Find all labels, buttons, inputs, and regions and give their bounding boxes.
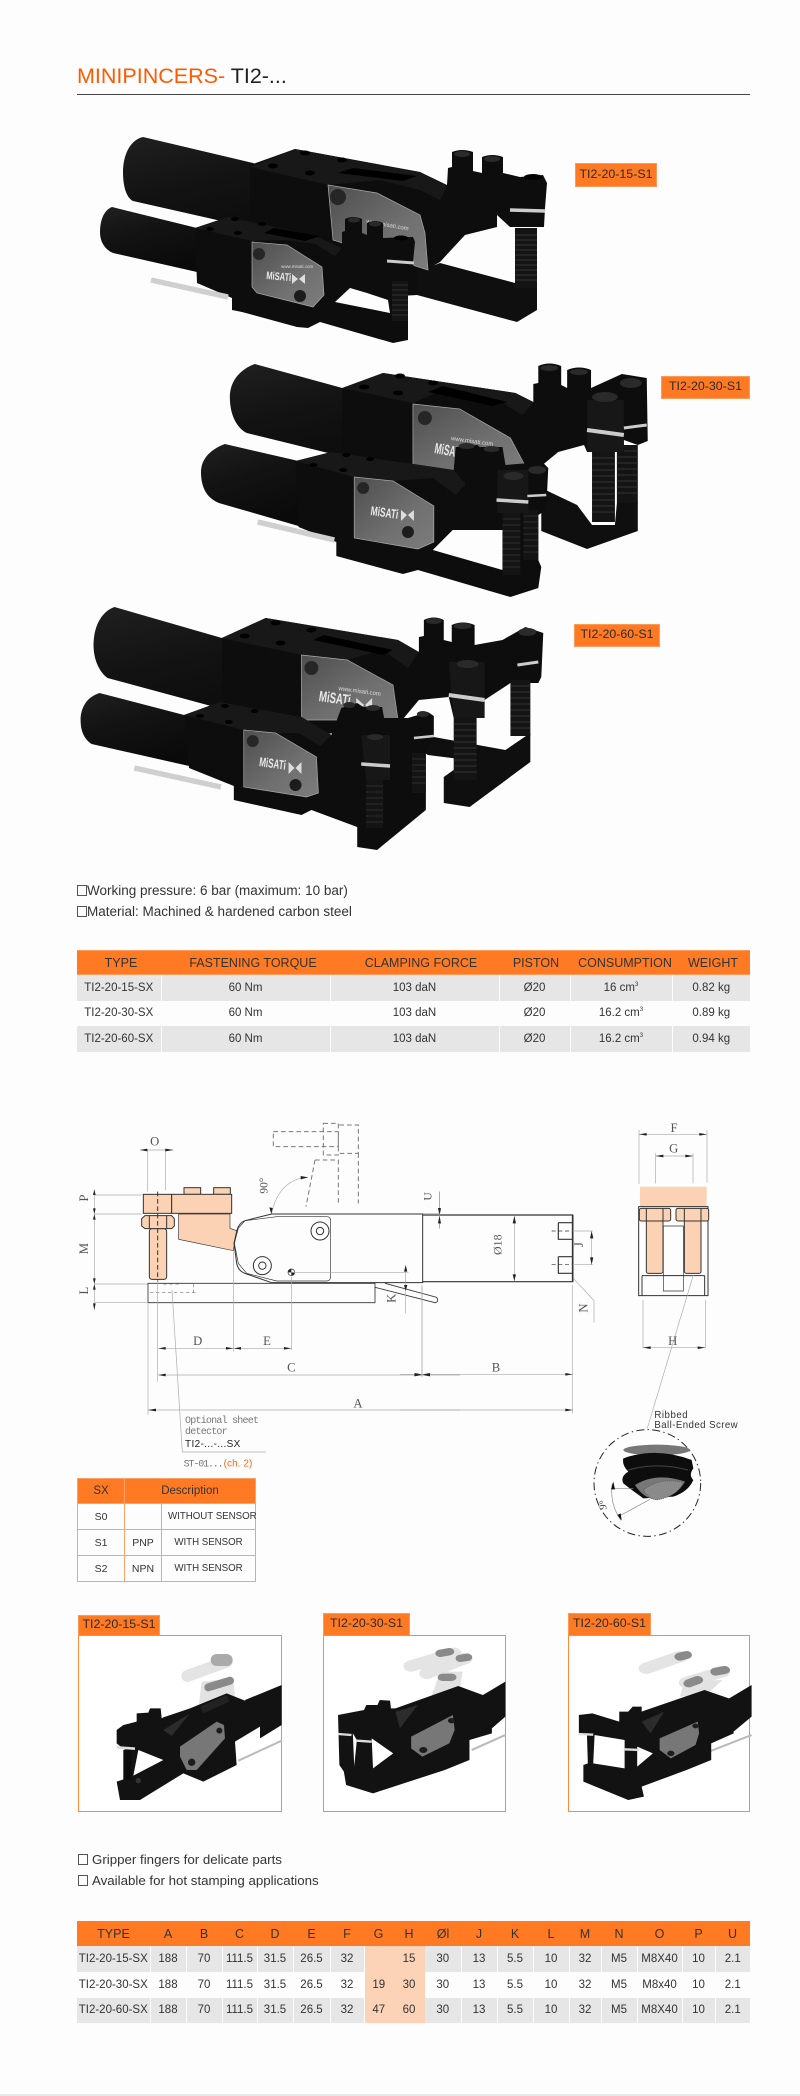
dimensions table: 188 (158, 2004, 178, 2016)
specifications table: 0.94 kg (692, 1033, 730, 1045)
dimensions table: 32 (579, 2004, 591, 2016)
panel: TI2-20-15-S1 (78, 1615, 282, 1812)
dimensions table: C (235, 1926, 244, 1940)
dimensions table: 30 (436, 2004, 449, 2016)
specifications table header: WEIGHT (688, 956, 738, 970)
dimension letters: C (287, 1361, 296, 1375)
bullet: hot stamping: Available for hot stamping applications (92, 1873, 319, 1888)
specifications table: 16.2 cm3 (599, 1033, 643, 1045)
specifications table header: CONSUMPTION (578, 956, 672, 970)
dimensions table: 10 (692, 1953, 705, 1965)
dimensions table: 31.5 (264, 1979, 286, 1991)
optional sheet detector note (184, 1415, 259, 1470)
dimensions table: N (614, 1926, 624, 1940)
opening stroke render 1 (117, 1660, 282, 1800)
specifications table: TI2-20-15-SX (84, 982, 153, 994)
dimension letters: L (77, 1287, 91, 1295)
dimensions table: 70 (198, 1953, 210, 1965)
dimensions table: 32 (341, 2004, 353, 2016)
large gripper (123, 137, 547, 322)
dimensions table: H (404, 1926, 414, 1940)
small gripper (201, 443, 548, 597)
large gripper (94, 607, 543, 807)
front view: G (669, 1142, 678, 1156)
dimensions table: 32 (341, 1953, 353, 1965)
dimensions table: 32 (579, 1953, 591, 1965)
bullet: material: Material: Machined & hardened carbon steel (87, 904, 352, 919)
dimensions table: 60 (403, 2004, 415, 2016)
dimensions table: 188 (158, 1953, 178, 1965)
tag: TI2-20-30-S1 (330, 1616, 403, 1630)
specifications table header: TYPE (105, 956, 137, 970)
optional sheet detector note: detector (185, 1426, 228, 1437)
specifications table header (77, 950, 750, 975)
specifications table: TI2-20-60-SX (84, 1033, 153, 1045)
dimensions table: 10 (692, 1979, 705, 1991)
dimensions table: 30 (436, 1953, 449, 1965)
rod (375, 1283, 438, 1303)
dimensions table: M8X40 (641, 2004, 678, 2016)
small gripper: www.misati.com (281, 264, 314, 269)
front view: H (668, 1334, 677, 1348)
optional sheet detector note: Optional sheet (185, 1415, 259, 1426)
optional sheet detector note: ST-01... (184, 1459, 224, 1470)
jaw (148, 1283, 375, 1303)
label: TI2-20-15-S1: TI2-20-15-S1 (579, 167, 652, 181)
dimensions table: 2.1 (725, 1979, 741, 1991)
tag (78, 1615, 160, 1636)
cylinder: B (492, 1361, 500, 1375)
dimension letters: 90° (258, 1178, 270, 1194)
dimensions table: TI2-20-60-SX (79, 2004, 148, 2016)
dimension letters: M (77, 1243, 91, 1254)
product photo: TI2-20-15-S1 (100, 137, 547, 343)
panel: TI2-20-30-S1 (323, 1613, 506, 1812)
front view: F (670, 1121, 678, 1135)
dimension letters: E (263, 1334, 271, 1348)
dimensions table (77, 1921, 750, 2023)
sensor description table: Description (161, 1485, 219, 1497)
specifications table: 60 Nm (229, 1007, 262, 1019)
opening stroke render 2 (338, 1652, 505, 1793)
tag (568, 1613, 651, 1636)
dimensions table: F (343, 1926, 351, 1940)
sensor description table: SX (93, 1485, 109, 1497)
dimensions table: 10 (545, 1979, 557, 1991)
dimensions table: A (164, 1926, 172, 1940)
small gripper: MiSATi (266, 270, 292, 284)
sensor description table: PNP (132, 1536, 154, 1548)
dimensions table: 31.5 (264, 1953, 286, 1965)
dimensions table: Øl (437, 1926, 449, 1940)
specifications table: Ø20 (524, 1033, 545, 1045)
specifications table: 103 daN (393, 1033, 436, 1045)
dimensions table: M8X40 (641, 1953, 678, 1965)
dimensions table: L (548, 1926, 554, 1940)
specifications table: 16 cm3 (604, 982, 638, 994)
dimensions table: 15 (403, 1953, 415, 1965)
cylinder: Ø18 (491, 1234, 505, 1255)
dimensions table: P (694, 1926, 703, 1940)
dimensions table: TI2-20-15-SX (79, 1953, 148, 1965)
large gripper: MiSATi (318, 688, 352, 709)
large gripper: www.misati.com (365, 219, 409, 232)
dimensions table: 5.5 (507, 2004, 523, 2016)
tag (323, 1613, 410, 1636)
optional sheet detector note: (ch. 2) (224, 1459, 252, 1470)
dimensions table: TI2-20-30-SX (79, 1979, 148, 1991)
sensor description table: WITH SENSOR (174, 1537, 243, 1548)
large gripper: www.misati.com (337, 686, 381, 698)
product photo: TI2-20-60-S1 (81, 607, 543, 850)
dimensions table: 10 (545, 2004, 557, 2016)
large gripper (230, 364, 648, 549)
dimensions table: 10 (692, 2004, 705, 2016)
dimensions table: U (728, 1926, 737, 1940)
dimensions table: B (200, 1926, 208, 1940)
dimension letters: A (353, 1397, 363, 1411)
clamp arm (peach) (142, 1188, 237, 1279)
opening stroke render 3 (579, 1655, 752, 1800)
dimensions table: 111.5 (226, 2004, 253, 2016)
ribbed ball-ended screw detail: 9° (599, 1500, 610, 1510)
dimensions table: 13 (473, 2004, 485, 2016)
dimensions table: 2.1 (725, 1953, 741, 1965)
dimension letters: U (422, 1192, 434, 1200)
ribbed ball-ended screw detail: Ball-Ended Screw (654, 1420, 738, 1431)
dimension letters: P (77, 1194, 91, 1202)
cylinder: J (572, 1242, 586, 1247)
frame (323, 1635, 506, 1812)
label: TI2-20-30-S1: TI2-20-30-S1 (669, 379, 742, 393)
tag: TI2-20-60-S1 (573, 1616, 646, 1630)
large gripper: MiSATi (433, 440, 464, 462)
specifications table header: PISTON (513, 956, 559, 970)
dimensions table: 32 (579, 1979, 591, 1991)
dimensions table: 70 (198, 1979, 210, 1991)
frame (78, 1635, 282, 1812)
cylinder: N (576, 1303, 590, 1313)
small gripper: MiSATi (370, 503, 399, 522)
body (234, 1214, 423, 1283)
specifications table: 16.2 cm3 (599, 1007, 643, 1019)
dimensions table: 111.5 (226, 1953, 253, 1965)
sensor description table: S1 (95, 1536, 107, 1548)
sensor description table (77, 1478, 257, 1582)
dimensions table: M8x40 (642, 1979, 677, 1991)
small gripper: MiSATi (258, 754, 287, 773)
dimensions table: E (307, 1926, 316, 1940)
dimensions table: 30 (436, 1979, 449, 1991)
optional sheet detector note: TI2-...-...SX (185, 1439, 241, 1450)
dimension lines (94, 1150, 460, 1452)
dimensions table: K (511, 1926, 519, 1940)
dimension letters: O (150, 1134, 159, 1148)
panel: TI2-20-60-S1 (568, 1613, 750, 1812)
dimensions table: 26.5 (300, 1979, 323, 1991)
dimensions table: 111.5 (226, 1979, 253, 1991)
sensor description table: WITHOUT SENSOR (168, 1511, 257, 1522)
cylinder (400, 1192, 594, 1413)
dimensions table: 26.5 (300, 1953, 323, 1965)
dimensions table: D (270, 1926, 280, 1940)
ribbed ball-ended screw detail (594, 1410, 738, 1536)
dimensions table: 32 (341, 1979, 353, 1991)
bullet: working pressure: Working pressure: 6 bar (maximum: 10 bar) (87, 883, 348, 898)
dimensions table: TYPE (97, 1926, 130, 1940)
sensor description table: S0 (95, 1510, 107, 1522)
dimensions table: J (476, 1926, 482, 1940)
dimensions table: 5.5 (507, 1953, 523, 1965)
product photo: TI2-20-30-S1 (201, 364, 648, 597)
dimensions table: 26.5 (300, 2004, 323, 2016)
specifications table: 0.89 kg (692, 1007, 730, 1019)
side view (77, 1123, 460, 1470)
dimensions table: 2.1 (725, 2004, 741, 2016)
sensor description table: WITH SENSOR (174, 1563, 243, 1574)
dimension letters: K (385, 1293, 399, 1303)
ribbed ball-ended screw detail: Ribbed (654, 1410, 688, 1421)
dimension letters: D (193, 1334, 202, 1348)
dimensions table: M (580, 1926, 590, 1940)
large gripper: www.misati.com (449, 436, 494, 448)
sensor description table: S2 (95, 1562, 107, 1574)
dimensions table: 70 (198, 2004, 210, 2016)
ghost fingers (273, 1123, 358, 1207)
specifications table: 60 Nm (229, 1033, 262, 1045)
specifications table: 103 daN (393, 1007, 436, 1019)
dimensions table: 13 (473, 1953, 485, 1965)
specifications table: 103 daN (393, 982, 436, 994)
tag: TI2-20-15-S1 (82, 1617, 156, 1631)
title: MINIPINCERS- TI2-... (77, 64, 287, 88)
dimensions table: O (655, 1926, 664, 1940)
dimensions table: 10 (545, 1953, 557, 1965)
dimensions table: 19 (372, 1979, 385, 1991)
sensor description table: NPN (132, 1562, 154, 1574)
label: TI2-20-60-S1: TI2-20-60-S1 (580, 627, 654, 641)
dimensions table: 13 (473, 1979, 485, 1991)
dimensions table: 47 (372, 2004, 385, 2016)
dimensions table: 5.5 (507, 1979, 523, 1991)
front view (594, 1121, 738, 1536)
dimensions table: M5 (611, 1979, 627, 1991)
dimensions table: M5 (611, 1953, 627, 1965)
dimensions table: 30 (403, 1979, 415, 1991)
specifications table: Ø20 (524, 982, 545, 994)
dimensions table: G (374, 1926, 383, 1940)
specifications table header: CLAMPING FORCE (365, 956, 477, 970)
small gripper (100, 207, 415, 343)
specifications table: 60 Nm (229, 982, 262, 994)
bullet: gripper fingers: Gripper fingers for delicate parts (92, 1852, 282, 1867)
dimensions table: 31.5 (264, 2004, 286, 2016)
specifications table (77, 975, 750, 1052)
frame (568, 1635, 750, 1812)
dimensions table: 188 (158, 1979, 178, 1991)
dimension letters (77, 1134, 434, 1411)
dimensions table: M5 (611, 2004, 627, 2016)
specifications table: 0.82 kg (692, 982, 730, 994)
specifications table: TI2-20-30-SX (84, 1007, 153, 1019)
specifications table header: FASTENING TORQUE (189, 956, 317, 970)
specifications table: Ø20 (524, 1007, 545, 1019)
small gripper (81, 693, 434, 850)
